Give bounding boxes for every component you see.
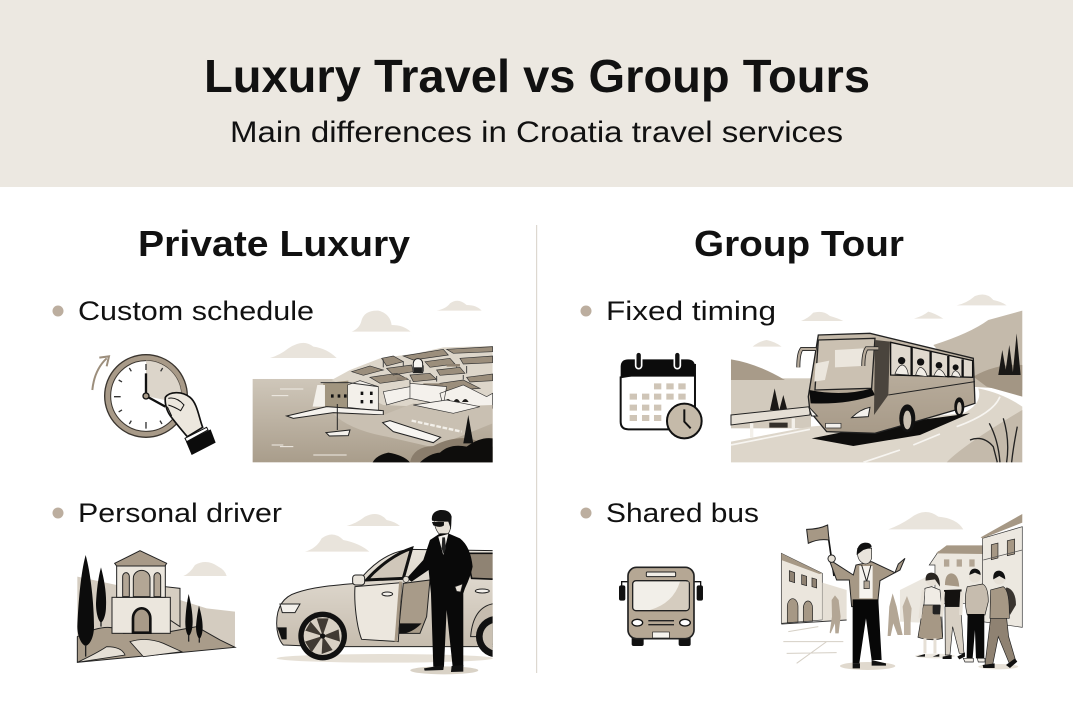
panel: group tour (580, 223, 1022, 670)
item: custom schedule label: Custom schedule (78, 296, 314, 326)
icon: clock with hand (92, 355, 216, 455)
title: Luxury Travel vs Group Tours (204, 50, 870, 102)
subtitle: Main differences in Croatia travel services (230, 116, 843, 149)
illustration: tour guide with group (781, 512, 1022, 670)
illustration: Dubrovnik harbour (253, 301, 493, 462)
panel: private luxury (52, 223, 517, 674)
illustration: coach on coastal road (731, 295, 1022, 462)
item: fixed timing label: Fixed timing (606, 296, 776, 326)
header band (0, 0, 1073, 187)
illustration: hilltop villa and cypresses (77, 551, 235, 662)
illustration: personal driver opening car door (277, 510, 517, 674)
icon: calendar with clock (621, 352, 702, 438)
heading: group tour: Group Tour (694, 223, 904, 264)
item: personal driver label: Personal driver (78, 498, 282, 528)
heading: private luxury: Private Luxury (138, 223, 410, 264)
icon: front view bus (619, 567, 703, 646)
item: shared bus label: Shared bus (606, 498, 759, 528)
